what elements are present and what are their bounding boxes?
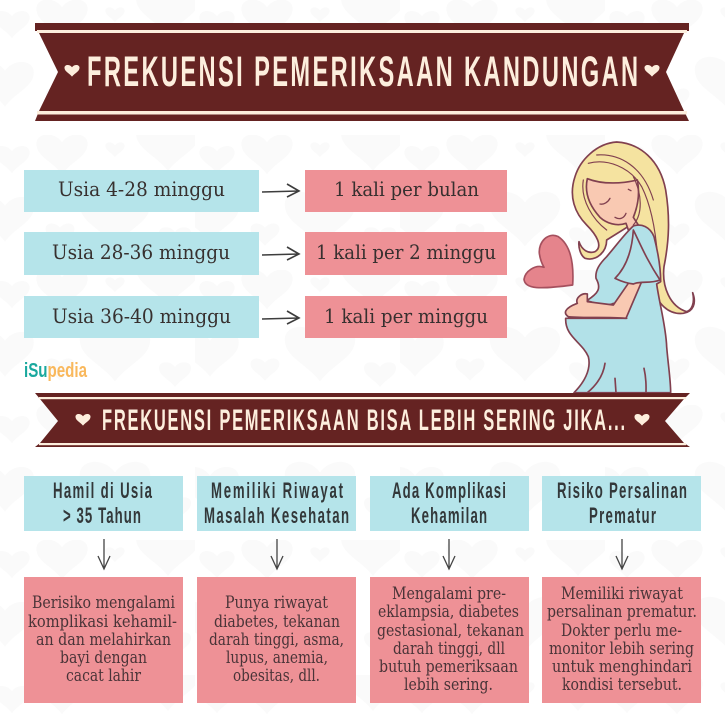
description: Dokter perlu me- [561, 621, 682, 640]
frequency row 1 [24, 170, 507, 212]
description: butuh pemeriksaan [379, 657, 518, 676]
age box 2 [24, 232, 259, 275]
heading: Prematur [589, 504, 656, 528]
description: obesitas, dll. [233, 666, 320, 685]
heading: > 35 Tahun [63, 504, 141, 528]
sleeve [615, 230, 660, 284]
frequency box 1 [305, 170, 507, 212]
description: Berisiko mengalami [32, 593, 175, 612]
description: bayi dengan [60, 648, 147, 667]
panel: age over 35 [24, 476, 183, 703]
description: monitor lebih sering [549, 639, 694, 658]
frequency box 3 [305, 296, 507, 338]
age text 3: Usia 36-40 minggu [52, 305, 231, 328]
frequency row 3 [24, 296, 507, 338]
frequency box 2 [305, 232, 507, 275]
description: Mengalami pre- [392, 584, 506, 603]
title banner [35, 23, 689, 121]
arrow down [443, 539, 455, 569]
description: diabetes, tekanan [214, 612, 340, 631]
heading: Kehamilan [411, 504, 487, 528]
panel: medical history [197, 476, 356, 703]
description box [24, 577, 183, 703]
description: gestasional, tekanan [377, 621, 524, 640]
heading: Memiliki Riwayat [211, 479, 343, 503]
age box 3 [24, 296, 259, 338]
frequency text 3: 1 kali per minggu [324, 305, 488, 328]
arrow down [271, 539, 283, 569]
icon: left heart [64, 65, 80, 77]
icon: right heart [634, 414, 650, 426]
arrow 2 [262, 247, 299, 260]
arrow 3 [262, 311, 299, 324]
arrow down [616, 539, 628, 569]
heading: Masalah Kesehatan [204, 504, 349, 528]
panel: pregnancy complications [370, 476, 529, 703]
description: kondisi tersebut. [562, 675, 682, 694]
heading box [197, 476, 356, 531]
heading: Hamil di Usia [53, 479, 153, 503]
age text 2: Usia 28-36 minggu [52, 241, 230, 264]
icon: floating heart [524, 235, 573, 288]
logo: iSupedia: iSupedia [24, 360, 88, 382]
frequency text 1: 1 kali per bulan [334, 178, 479, 201]
description: darah tinggi, dll [393, 639, 505, 658]
arrow down [98, 539, 110, 569]
illustration: pregnant woman with heart [524, 142, 694, 393]
description: lebih sering. [404, 675, 493, 694]
hair strands [583, 155, 658, 270]
age text 1: Usia 4-28 minggu [58, 178, 225, 201]
heading box [370, 476, 529, 531]
heading: Ada Komplikasi [392, 479, 506, 503]
description box [370, 577, 529, 703]
description box [542, 577, 701, 703]
arm [565, 282, 642, 318]
description: lupus, anemia, [226, 648, 328, 667]
frequency text 2: 1 kali per 2 minggu [316, 241, 496, 264]
description: cacat lahir [66, 666, 141, 685]
dress folds [587, 363, 646, 393]
eye and ear details [600, 189, 631, 219]
description: persalinan prematur. [547, 602, 697, 621]
description: an dan melahirkan [36, 630, 171, 649]
heading: Risiko Persalinan [557, 479, 687, 503]
description box [197, 577, 356, 703]
frequency row 2 [24, 232, 507, 275]
age box 1 [24, 170, 259, 212]
icon: left heart [75, 414, 91, 426]
panel: premature birth risk [542, 476, 701, 703]
arrow 1 [262, 184, 299, 197]
title: FREKUENSI PEMERIKSAAN KANDUNGAN [87, 49, 638, 96]
description: untuk menghindari [552, 657, 692, 676]
heading box [542, 476, 701, 531]
icon: right heart [644, 65, 660, 77]
description: eklampsia, diabetes [378, 602, 519, 621]
hair [572, 142, 694, 313]
description: komplikasi kehamil- [28, 612, 177, 631]
description: Memiliki riwayat [561, 584, 683, 603]
description: darah tinggi, asma, [209, 630, 344, 649]
heading box [24, 476, 183, 531]
face [586, 179, 639, 230]
description: Punya riwayat [225, 593, 328, 612]
subtitle: FREKUENSI PEMERIKSAAN BISA LEBIH SERING JIKA... [102, 404, 625, 437]
dress [566, 225, 671, 393]
subtitle banner [35, 393, 690, 447]
